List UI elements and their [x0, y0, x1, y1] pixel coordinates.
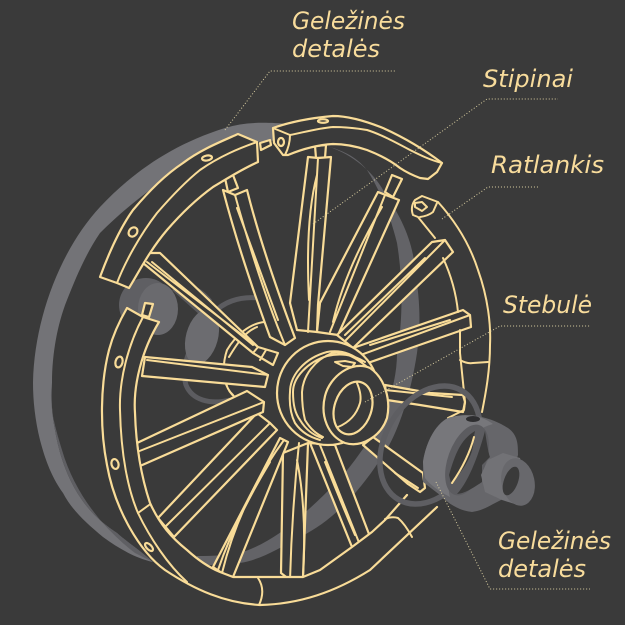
- spoke: crease right: [358, 315, 470, 356]
- spoke: left: [142, 357, 268, 387]
- spoke: crease lower left bottom: [218, 440, 284, 573]
- spoke: crease left: [147, 360, 268, 375]
- label: Stebulė: Stebulė: [503, 291, 592, 319]
- spoke: crease left lower: [137, 402, 264, 452]
- label: Geležinės detalės, bottom: Geležinės: [498, 527, 611, 555]
- spoke: crease right lower: [385, 390, 452, 397]
- spoke: lower right: [363, 437, 425, 492]
- spoke: lower left bottom: [213, 438, 288, 577]
- hole: [110, 458, 120, 470]
- label: Geležinės detalės, top: [292, 7, 405, 63]
- iron tyre behind the wheel: [33, 123, 419, 566]
- spokes: [137, 145, 471, 580]
- hole: [144, 542, 154, 552]
- hole: [202, 155, 212, 161]
- spoke: right: [353, 310, 471, 365]
- iron ring and bearing: [360, 368, 539, 522]
- hole: [114, 356, 124, 368]
- spoke: near top left: [223, 175, 295, 345]
- spoke: right upper: [337, 240, 453, 348]
- label: Geležinės detalės, bottom: detalės: [498, 555, 586, 583]
- spoke: crease lower left: [165, 423, 270, 527]
- hole: [318, 119, 328, 123]
- spoke: upper right: [317, 175, 402, 335]
- hole: [278, 138, 284, 146]
- label: Geležinės detalės, top: detalės: [292, 35, 380, 63]
- rim: right segment: [412, 196, 490, 418]
- bearing rear body: [423, 415, 518, 512]
- spoke: bottom right: [310, 443, 372, 550]
- spoke: upper left, exploded: [143, 253, 278, 365]
- rim: top right iron segment: [273, 116, 442, 179]
- rim: lower left and bottom segment: [102, 303, 437, 605]
- spoke: right lower: [385, 385, 465, 412]
- rear hub and iron collar: [119, 278, 265, 402]
- label: Ratlankis: Ratlankis: [491, 151, 604, 179]
- bearing nozzle: [481, 453, 528, 505]
- spoke: crease bottom: [290, 443, 304, 580]
- spoke: top: [290, 145, 331, 332]
- spoke: bottom: [281, 443, 308, 580]
- hole: [127, 226, 139, 238]
- spoke: lower left: [158, 413, 277, 537]
- bearing front band: [423, 415, 493, 497]
- rim: top left iron segment: [100, 134, 271, 288]
- leader: spokes: [313, 99, 558, 224]
- label: Geležinės detalės, bottom: [498, 527, 611, 583]
- bearing opening: [436, 419, 498, 501]
- leader: felloe: [442, 187, 538, 219]
- leader: top iron parts: [225, 71, 395, 130]
- spoke: crease lower right: [395, 473, 418, 488]
- hub: [277, 341, 388, 445]
- leader: hub: [365, 326, 590, 402]
- label: Stipinai: Stipinai: [483, 65, 573, 93]
- spoke: crease right upper: [345, 240, 445, 340]
- leader: lower iron parts: [436, 482, 590, 589]
- hub opening: [327, 377, 379, 439]
- spoke: crease bottom right: [320, 445, 362, 550]
- label: Geležinės detalės, top: Geležinės: [292, 7, 405, 35]
- spoke: left lower: [137, 391, 264, 466]
